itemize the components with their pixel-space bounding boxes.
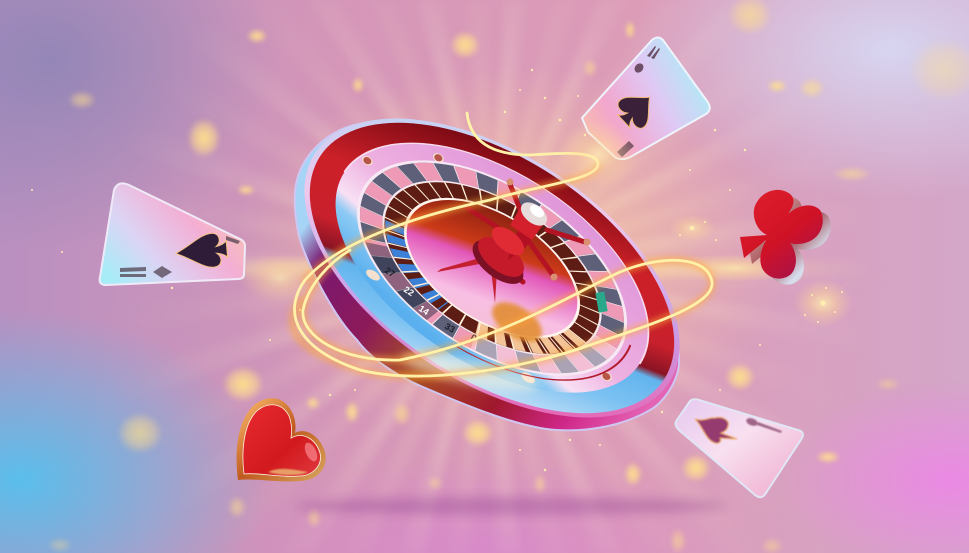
suit icon: heart <box>237 398 326 481</box>
spade <box>695 417 737 443</box>
wheel rim and face <box>253 58 731 478</box>
wheel number labels: 27 <box>383 265 397 279</box>
wheel body <box>295 123 679 430</box>
club side <box>748 196 831 285</box>
spade <box>612 84 662 134</box>
wheel number labels: 33 <box>443 321 457 335</box>
ring glow <box>292 165 712 376</box>
green pocket <box>595 291 608 313</box>
playing card: bottom right <box>676 399 803 497</box>
card pips <box>617 46 660 157</box>
turret <box>465 178 590 292</box>
sunburst rays <box>232 6 747 546</box>
suit icon: club <box>740 190 831 285</box>
central gold glow <box>556 121 640 189</box>
pocket ring <box>354 146 630 390</box>
gold sparkles <box>31 69 853 471</box>
club face <box>740 190 823 279</box>
card pips <box>120 236 240 278</box>
playing card: left <box>100 183 245 285</box>
horizontal light flare <box>130 65 870 445</box>
ring core <box>294 113 712 376</box>
roulette wheel <box>253 58 731 478</box>
floor shadow <box>295 497 725 515</box>
thin red line around track <box>454 264 631 426</box>
playing card: top right <box>582 38 710 159</box>
golden swirl rings <box>292 113 712 376</box>
number track <box>320 116 664 420</box>
studs <box>310 120 663 419</box>
wheel number labels: 22 <box>402 284 416 298</box>
card pips <box>745 417 782 433</box>
rim light wash <box>399 346 541 398</box>
bowl reflections <box>437 255 549 350</box>
wheel number labels: 0 <box>469 332 478 343</box>
wheel number labels: 14 <box>417 303 431 317</box>
wheel number labels <box>383 265 478 343</box>
spade <box>174 232 228 270</box>
bowl <box>380 169 604 367</box>
